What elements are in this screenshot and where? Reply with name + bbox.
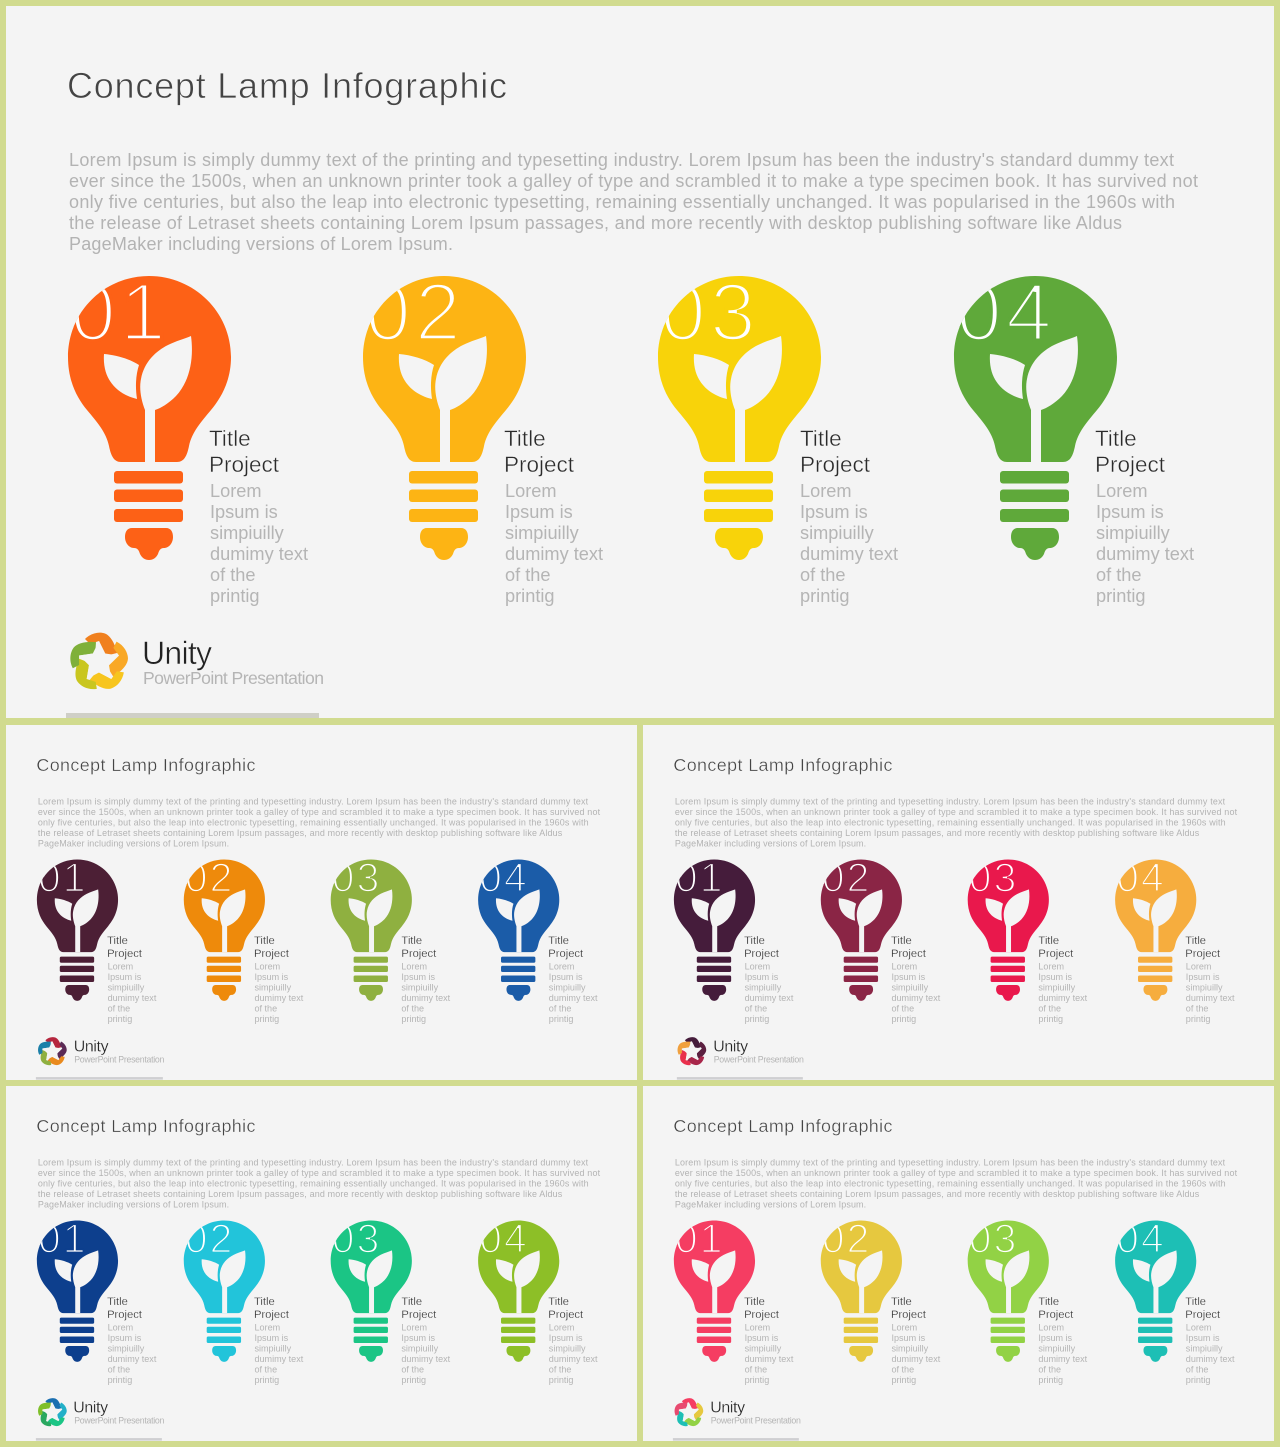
logo [673, 1398, 801, 1430]
lamp 03: printig [800, 586, 850, 606]
lamp 04: simpiuilly [1186, 1343, 1223, 1353]
lamp 03: Title [1038, 1296, 1059, 1308]
lamp 01: Title [744, 935, 765, 947]
lamp 03: of the [1038, 1364, 1061, 1374]
lamp 01: Title [107, 1296, 128, 1308]
lamp 02: simpiuilly [892, 982, 929, 992]
lamp 02: of the [255, 1364, 277, 1374]
lamp 03: printig [1038, 1375, 1063, 1385]
lamp 03: simpiuilly [1038, 982, 1076, 992]
lamp 02: dumimy text [255, 993, 304, 1003]
body paragraph: PageMaker including versions of Lorem Ipsum. [69, 234, 453, 254]
body paragraph: PageMaker including versions of Lorem Ipsum. [675, 839, 866, 849]
lamp 03: of the [401, 1003, 424, 1013]
title: Concept Lamp Infographic [67, 65, 507, 106]
lamp 01: printig [108, 1375, 132, 1385]
lamp 03: Ipsum is [800, 502, 868, 522]
lamp 04: Title [548, 1296, 569, 1308]
lamp 02: Project [254, 1309, 290, 1321]
lamp 02: Lorem [255, 1323, 280, 1333]
lamp 02: Ipsum is [505, 502, 573, 522]
logo [67, 633, 324, 696]
footer bar [677, 1077, 803, 1080]
body paragraph: ever since the 1500s, when an unknown printer took a galley of type and scrambled it to make a type specimen book. It has survived not [38, 1168, 601, 1178]
lamp 03: 03 [332, 854, 381, 900]
lamp 04: simpiuilly [1186, 982, 1223, 992]
lamp 03: dumimy text [1038, 993, 1088, 1003]
lamp 01: Lorem [108, 962, 133, 972]
lamp 02: Title [254, 1296, 275, 1308]
lamp 01: Lorem [745, 962, 770, 972]
lamp 03: printig [401, 1014, 426, 1024]
lamp 03: Lorem [401, 1323, 427, 1333]
lamp 03: simpiuilly [800, 523, 875, 543]
lamp 04: 04 [1116, 1215, 1166, 1261]
lamp 04: Lorem [1096, 481, 1148, 501]
lamp 01 [68, 267, 308, 606]
lamp 01: printig [745, 1014, 769, 1024]
title: Concept Lamp Infographic [673, 1116, 893, 1136]
panel: purple orange green blue variant [6, 725, 637, 1080]
lamp 01: of the [745, 1364, 767, 1374]
lamp 02: simpiuilly [255, 1343, 292, 1353]
logo: PowerPoint Presentation [714, 1055, 804, 1065]
lamp 02: Project [891, 1309, 927, 1321]
lamp 04: printig [1096, 586, 1146, 606]
lamp 01: Title [209, 426, 251, 451]
lamp 01: 01 [675, 1215, 725, 1261]
lamp 02: Lorem [505, 481, 557, 501]
lamp 03: Lorem [401, 962, 427, 972]
lamp 01: Lorem [210, 481, 262, 501]
logo: PowerPoint Presentation [74, 1055, 164, 1065]
panel: pink yellow lime teal variant [643, 1086, 1274, 1441]
lamp 01: 01 [70, 267, 170, 358]
lamp 02: 02 [365, 267, 465, 358]
lamp 01: simpiuilly [210, 523, 285, 543]
lamp 04: of the [1096, 565, 1142, 585]
lamp 02: of the [892, 1364, 914, 1374]
lamp 01: of the [108, 1003, 130, 1013]
lamp 04: 04 [479, 854, 529, 900]
lamp 03: simpiuilly [401, 982, 439, 992]
logo: Unity [142, 635, 212, 671]
lamp 04: Lorem [549, 1323, 574, 1333]
lamp 02: Title [891, 935, 912, 947]
lamp 03: Lorem [1038, 1323, 1064, 1333]
lamp 03: 03 [969, 1215, 1018, 1261]
lamp 02: Ipsum is [255, 1333, 289, 1343]
lamp 03: Lorem [800, 481, 852, 501]
body paragraph: PageMaker including versions of Lorem Ipsum. [38, 1200, 229, 1210]
lamp 01: simpiuilly [745, 1343, 782, 1353]
logo: PowerPoint Presentation [143, 668, 324, 688]
lamp 03: Ipsum is [1038, 972, 1073, 982]
lamp 01: Project [107, 1309, 143, 1321]
logo: Unity [74, 1039, 109, 1056]
lamp 03: simpiuilly [1038, 1343, 1076, 1353]
lamp 03: Ipsum is [401, 1333, 436, 1343]
lamp 01: Project [107, 948, 143, 960]
lamp 03: 03 [660, 267, 760, 358]
lamp 02: Project [254, 948, 290, 960]
lamp 03: of the [1038, 1003, 1061, 1013]
lamp 04: printig [549, 1014, 573, 1024]
lamp 02: Title [254, 935, 275, 947]
lamp 01: dumimy text [745, 1354, 794, 1364]
body paragraph: only five centuries, but also the leap into electronic typesetting, remaining essentially unchanged. It was popularised in the 1960s with [69, 192, 1175, 212]
lamp 03: dumimy text [1038, 1354, 1088, 1364]
body paragraph [675, 1158, 1238, 1210]
lamp 03: 03 [969, 854, 1018, 900]
lamp 04: dumimy text [1186, 993, 1235, 1003]
lamp 02: 02 [185, 1215, 235, 1261]
lamp 01: Lorem [108, 1323, 133, 1333]
lamp 04: Project [548, 948, 584, 960]
lamp 02 [184, 1215, 304, 1385]
lamp 04: 04 [956, 267, 1056, 358]
lamp 01 [674, 1215, 794, 1385]
lamp 04: Ipsum is [1186, 972, 1220, 982]
logo [36, 1037, 164, 1069]
lamp 01: Ipsum is [745, 1333, 779, 1343]
lamp 04 [1115, 1215, 1235, 1385]
lamp 02: Project [504, 452, 575, 477]
lamp 02: printig [255, 1014, 279, 1024]
lamp 03: Project [1038, 948, 1074, 960]
logo: PowerPoint Presentation [74, 1416, 164, 1426]
lamp 02: Lorem [255, 962, 280, 972]
lamp 03: Ipsum is [1038, 1333, 1073, 1343]
lamp 01: Ipsum is [108, 972, 142, 982]
lamp 04: Project [548, 1309, 584, 1321]
lamp 01 [674, 854, 794, 1024]
body paragraph: the release of Letraset sheets containing Lorem Ipsum passages, and more recently with desktop publishing software like Aldus [675, 828, 1200, 838]
lamp 02: of the [255, 1003, 277, 1013]
lamp 02: dumimy text [255, 1354, 304, 1364]
lamp 03: of the [401, 1364, 424, 1374]
lamp 04: of the [549, 1364, 571, 1374]
lamp 03 [658, 267, 898, 606]
body paragraph: PageMaker including versions of Lorem Ipsum. [38, 839, 229, 849]
lamp 02 [821, 854, 941, 1024]
lamp 01: Title [744, 1296, 765, 1308]
lamp 01: of the [108, 1364, 130, 1374]
lamp 02: printig [892, 1375, 916, 1385]
lamp 02: Lorem [892, 1323, 917, 1333]
lamp 01 [37, 1215, 157, 1385]
panel: maroon crimson amber variant [643, 725, 1274, 1080]
body paragraph: the release of Letraset sheets containing Lorem Ipsum passages, and more recently with desktop publishing software like Aldus [675, 1189, 1200, 1199]
body paragraph: ever since the 1500s, when an unknown printer took a galley of type and scrambled it to make a type specimen book. It has survived not [675, 1168, 1238, 1178]
lamp 03: dumimy text [401, 993, 451, 1003]
lamp 03 [331, 1215, 451, 1385]
lamp 02 [184, 854, 304, 1024]
lamp 03: dumimy text [800, 544, 898, 564]
body paragraph: ever since the 1500s, when an unknown printer took a galley of type and scrambled it to make a type specimen book. It has survived not [69, 171, 1198, 191]
body paragraph [675, 797, 1238, 849]
lamp 01: dumimy text [108, 1354, 157, 1364]
lamp 02: 02 [822, 854, 872, 900]
lamp 04: printig [1186, 1014, 1210, 1024]
lamp 02: Project [891, 948, 927, 960]
logo: Unity [710, 1400, 745, 1417]
lamp 03: printig [401, 1375, 426, 1385]
lamp 01: dumimy text [108, 993, 157, 1003]
lamp 02: printig [505, 586, 555, 606]
lamp 04: dumimy text [549, 1354, 598, 1364]
lamp 03 [968, 1215, 1088, 1385]
lamp 02 [363, 267, 603, 606]
title: Concept Lamp Infographic [36, 1116, 256, 1136]
footer bar [36, 1077, 163, 1080]
lamp 03: Project [401, 948, 437, 960]
lamp 04: Title [1185, 935, 1206, 947]
lamp 02: dumimy text [892, 993, 941, 1003]
lamp 04: Title [548, 935, 569, 947]
lamp 04: dumimy text [549, 993, 598, 1003]
body paragraph [69, 150, 1198, 254]
lamp 04 [478, 1215, 598, 1385]
lamp 04: Title [1185, 1296, 1206, 1308]
body paragraph: ever since the 1500s, when an unknown printer took a galley of type and scrambled it to make a type specimen book. It has survived not [38, 807, 601, 817]
lamp 01: dumimy text [210, 544, 308, 564]
lamp 01: printig [108, 1014, 132, 1024]
lamp 01: simpiuilly [108, 1343, 145, 1353]
footer bar [36, 1438, 162, 1441]
lamp 03: Project [800, 452, 871, 477]
lamp 04: 04 [479, 1215, 529, 1261]
lamp 01: Project [744, 1309, 780, 1321]
lamp 01: Ipsum is [108, 1333, 142, 1343]
lamp 03: Lorem [1038, 962, 1064, 972]
lamp 02: printig [892, 1014, 916, 1024]
lamp 04: Project [1095, 452, 1166, 477]
body paragraph: Lorem Ipsum is simply dummy text of the printing and typesetting industry. Lorem Ipsum has been the industry's standard dummy text [38, 797, 589, 807]
lamp 04: Ipsum is [549, 1333, 583, 1343]
lamp 02: dumimy text [505, 544, 603, 564]
body paragraph: only five centuries, but also the leap into electronic typesetting, remaining essentially unchanged. It was popularised in the 1960s with [38, 818, 589, 828]
lamp 04: dumimy text [1186, 1354, 1235, 1364]
lamp 01: simpiuilly [745, 982, 782, 992]
lamp 01: Project [744, 948, 780, 960]
lamp 01: of the [210, 565, 256, 585]
lamp 02: simpiuilly [255, 982, 292, 992]
lamp 04 [478, 854, 598, 1024]
lamp 02: 02 [822, 1215, 872, 1261]
title: Concept Lamp Infographic [36, 755, 256, 775]
footer bar [66, 713, 319, 718]
lamp 02: Ipsum is [892, 1333, 926, 1343]
lamp 03: Ipsum is [401, 972, 436, 982]
lamp 04: Ipsum is [1186, 1333, 1220, 1343]
lamp 02: Ipsum is [255, 972, 289, 982]
lamp 01: Title [107, 935, 128, 947]
lamp 01: Ipsum is [745, 972, 779, 982]
lamp 04: 04 [1116, 854, 1166, 900]
lamp 03 [331, 854, 451, 1024]
logo [36, 1398, 164, 1430]
lamp 04: simpiuilly [549, 982, 586, 992]
lamp 01: of the [745, 1003, 767, 1013]
lamp 03: printig [1038, 1014, 1063, 1024]
lamp 02: simpiuilly [505, 523, 580, 543]
lamp 04: Title [1095, 426, 1137, 451]
lamp 02: simpiuilly [892, 1343, 929, 1353]
lamp 04: Project [1185, 1309, 1221, 1321]
lamp 04: of the [549, 1003, 571, 1013]
lamp 04: simpiuilly [1096, 523, 1171, 543]
body paragraph: the release of Letraset sheets containing Lorem Ipsum passages, and more recently with desktop publishing software like Aldus [38, 828, 563, 838]
lamp 04: Lorem [549, 962, 574, 972]
lamp 04: simpiuilly [549, 1343, 586, 1353]
lamp 02: of the [892, 1003, 914, 1013]
footer bar [673, 1438, 799, 1441]
logo: PowerPoint Presentation [711, 1416, 801, 1426]
lamp 03 [968, 854, 1088, 1024]
lamp 03: dumimy text [401, 1354, 451, 1364]
lamp 04 [954, 267, 1194, 606]
body paragraph: the release of Letraset sheets containing Lorem Ipsum passages, and more recently with desktop publishing software like Aldus [38, 1189, 563, 1199]
logo [676, 1037, 804, 1069]
body paragraph: the release of Letraset sheets containing Lorem Ipsum passages, and more recently with desktop publishing software like Aldus [69, 213, 1122, 233]
lamp 04: printig [1186, 1375, 1210, 1385]
lamp 04: printig [549, 1375, 573, 1385]
lamp 02 [821, 1215, 941, 1385]
body paragraph [38, 797, 601, 849]
body paragraph: only five centuries, but also the leap into electronic typesetting, remaining essentially unchanged. It was popularised in the 1960s with [38, 1179, 589, 1189]
lamp 01: Lorem [745, 1323, 770, 1333]
lamp 03: Title [800, 426, 842, 451]
lamp 02: dumimy text [892, 1354, 941, 1364]
lamp 03: Project [1038, 1309, 1074, 1321]
lamp 04 [1115, 854, 1235, 1024]
lamp 04: Ipsum is [549, 972, 583, 982]
lamp 01: Ipsum is [210, 502, 278, 522]
panel: main orange to green variant [6, 6, 1274, 718]
lamp 04: Lorem [1186, 962, 1211, 972]
panel: navy cyan green variant [6, 1086, 637, 1441]
lamp 01: 01 [38, 1215, 88, 1261]
body paragraph: Lorem Ipsum is simply dummy text of the printing and typesetting industry. Lorem Ipsum has been the industry's standard dummy text [675, 797, 1226, 807]
lamp 02: 02 [185, 854, 235, 900]
logo: Unity [73, 1400, 108, 1417]
lamp 03: Title [401, 1296, 422, 1308]
lamp 01: 01 [38, 854, 88, 900]
lamp 01: 01 [675, 854, 725, 900]
lamp 03: simpiuilly [401, 1343, 439, 1353]
lamp 04: dumimy text [1096, 544, 1194, 564]
lamp 01: Project [209, 452, 280, 477]
body paragraph [38, 1158, 601, 1210]
lamp 02: of the [505, 565, 551, 585]
lamp 02: Title [504, 426, 546, 451]
body paragraph: only five centuries, but also the leap into electronic typesetting, remaining essentially unchanged. It was popularised in the 1960s with [675, 1179, 1226, 1189]
lamp 01: printig [745, 1375, 769, 1385]
lamp 04: Lorem [1186, 1323, 1211, 1333]
lamp 04: of the [1186, 1003, 1208, 1013]
title: Concept Lamp Infographic [673, 755, 893, 775]
body paragraph: Lorem Ipsum is simply dummy text of the printing and typesetting industry. Lorem Ipsum has been the industry's standard dummy text [675, 1158, 1226, 1168]
lamp 03: Title [1038, 935, 1059, 947]
body paragraph: Lorem Ipsum is simply dummy text of the printing and typesetting industry. Lorem Ipsum has been the industry's standard dummy text [38, 1158, 589, 1168]
lamp 02: Title [891, 1296, 912, 1308]
logo: Unity [713, 1039, 748, 1056]
lamp 04: of the [1186, 1364, 1208, 1374]
lamp 02: Lorem [892, 962, 917, 972]
lamp 02: Ipsum is [892, 972, 926, 982]
lamp 03: Project [401, 1309, 437, 1321]
lamp 01: dumimy text [745, 993, 794, 1003]
body paragraph: ever since the 1500s, when an unknown printer took a galley of type and scrambled it to make a type specimen book. It has survived not [675, 807, 1238, 817]
lamp 03: Title [401, 935, 422, 947]
lamp 02: printig [255, 1375, 279, 1385]
lamp 04: Project [1185, 948, 1221, 960]
body paragraph: only five centuries, but also the leap into electronic typesetting, remaining essentially unchanged. It was popularised in the 1960s with [675, 818, 1226, 828]
lamp 04: Ipsum is [1096, 502, 1164, 522]
body paragraph: Lorem Ipsum is simply dummy text of the printing and typesetting industry. Lorem Ipsum has been the industry's standard dummy text [69, 150, 1174, 170]
lamp 01: simpiuilly [108, 982, 145, 992]
lamp 01: printig [210, 586, 260, 606]
body paragraph: PageMaker including versions of Lorem Ipsum. [675, 1200, 866, 1210]
lamp 03: 03 [332, 1215, 381, 1261]
lamp 03: of the [800, 565, 846, 585]
lamp 01 [37, 854, 157, 1024]
